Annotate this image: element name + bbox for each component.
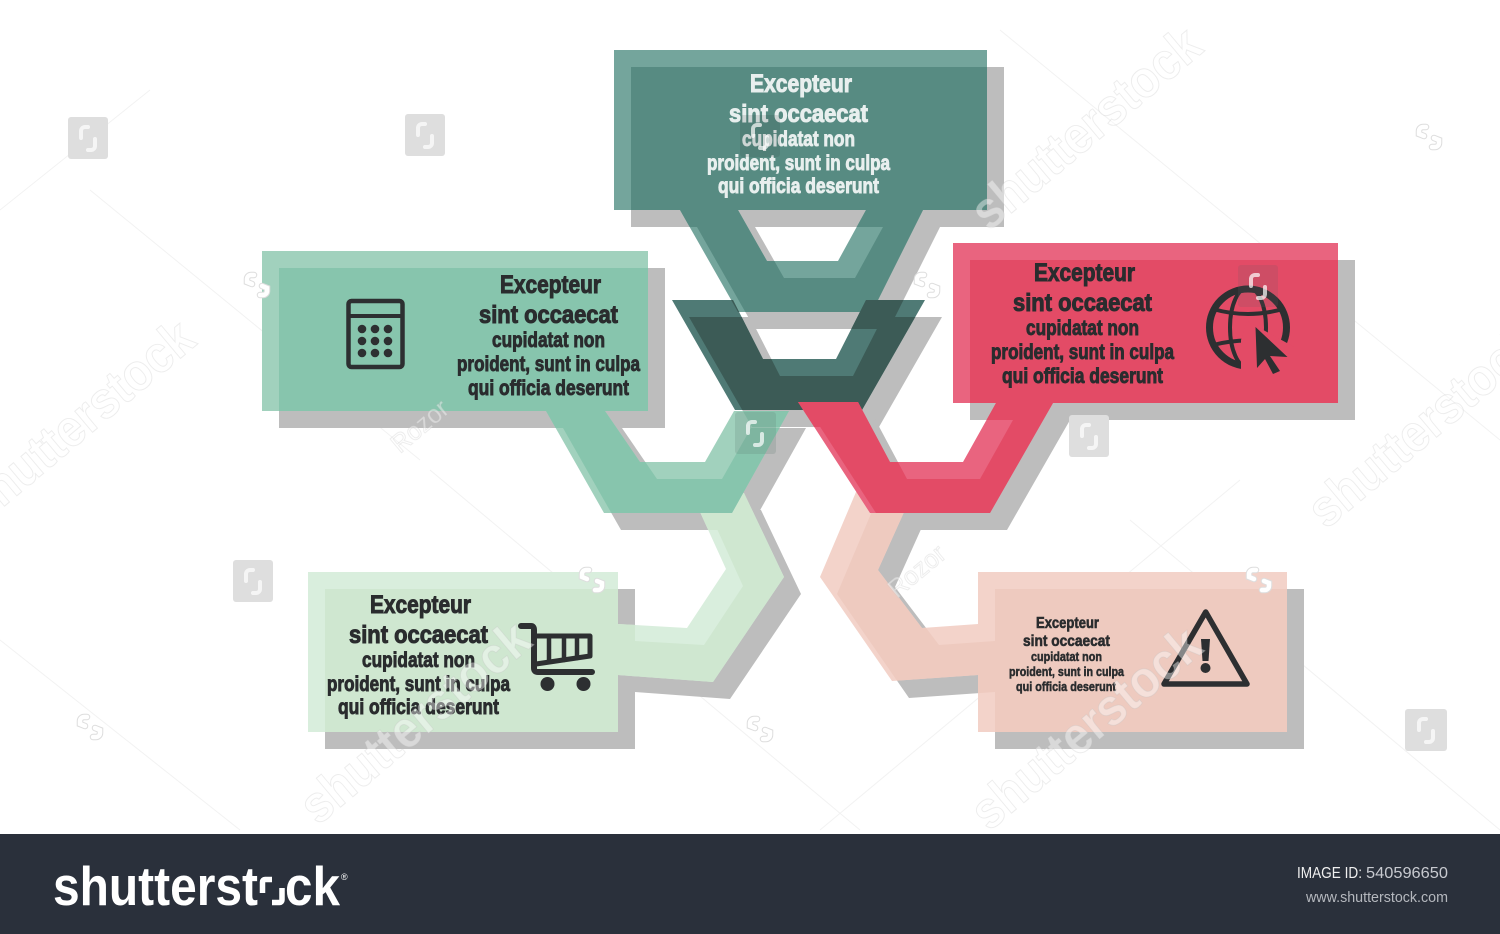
text: teal panel copy: cupidatat non bbox=[742, 128, 855, 151]
footer bar bbox=[0, 834, 1500, 934]
text: green panel copy: cupidatat non bbox=[492, 329, 605, 352]
panel: mint cart callout bbox=[308, 490, 784, 732]
text: red panel copy: qui officia deserunt bbox=[1002, 365, 1163, 388]
icon: calculator bbox=[348, 301, 402, 367]
text: mint panel copy: cupidatat non bbox=[362, 649, 475, 672]
footer image id: www.shutterstock.com bbox=[1305, 889, 1448, 906]
text: red panel copy: sint occaecat bbox=[1013, 289, 1153, 317]
text: teal panel copy bbox=[707, 70, 890, 198]
watermark: diagonal stock wordmarks: shutterstock bbox=[288, 609, 542, 835]
text: red panel copy bbox=[991, 259, 1174, 388]
text: teal panel copy: sint occaecat bbox=[729, 100, 869, 128]
text: red panel copy: proident, sunt in culpa bbox=[991, 341, 1174, 364]
text: peach panel copy bbox=[1009, 615, 1125, 694]
footer logo wordmark: ck bbox=[285, 855, 340, 917]
text: mint panel copy: proident, sunt in culpa bbox=[327, 673, 510, 696]
text: peach panel copy: Excepteur bbox=[1036, 615, 1099, 632]
footer image id bbox=[1297, 865, 1448, 906]
panel: green calculator callout bbox=[262, 251, 789, 513]
text: peach panel copy: cupidatat non bbox=[1031, 650, 1102, 664]
text: green panel copy: Excepteur bbox=[500, 271, 601, 299]
watermark: diagonal stock wordmarks: shutterstock bbox=[959, 15, 1213, 241]
footer image id: 540596650 bbox=[1366, 865, 1448, 882]
text: red panel copy: Excepteur bbox=[1034, 259, 1135, 287]
text: peach panel copy: sint occaecat bbox=[1023, 633, 1110, 650]
panel: red globe callout bbox=[798, 243, 1338, 513]
text: green panel copy: sint occaecat bbox=[479, 301, 619, 329]
panel: teal top callout bbox=[614, 50, 987, 312]
text: red panel copy: cupidatat non bbox=[1026, 317, 1139, 340]
text: mint panel copy: Excepteur bbox=[370, 591, 471, 619]
text: green panel copy: qui officia deserunt bbox=[468, 377, 629, 400]
watermark: diagonal stock wordmarks: Rozor bbox=[882, 538, 952, 604]
panel: peach warning callout bbox=[820, 490, 1287, 732]
text: green panel copy: proident, sunt in culpa bbox=[457, 353, 640, 376]
text: teal panel copy: qui officia deserunt bbox=[718, 175, 879, 198]
watermark: diagonal stock wordmarks: Rozor bbox=[385, 393, 455, 459]
watermark: stock logo squares bbox=[68, 114, 1447, 751]
text: mint panel copy bbox=[327, 591, 510, 719]
watermark: diagonal stock wordmarks: shutterstock bbox=[959, 615, 1213, 841]
text: peach panel copy: qui officia deserunt bbox=[1016, 680, 1117, 694]
text: mint panel copy: qui officia deserunt bbox=[338, 696, 499, 719]
footer logo wordmark: ® bbox=[341, 872, 348, 882]
text: teal panel copy: Excepteur bbox=[750, 70, 852, 98]
text: mint panel copy: sint occaecat bbox=[349, 621, 489, 649]
text: peach panel copy: proident, sunt in culpa bbox=[1009, 665, 1125, 679]
text: green panel copy bbox=[457, 271, 640, 400]
footer image id: IMAGE ID: bbox=[1297, 865, 1362, 882]
centre dark chevron bbox=[672, 300, 925, 410]
drop shadows bbox=[279, 67, 1355, 749]
footer logo wordmark: shutterst bbox=[53, 855, 258, 917]
icon: shopping cart bbox=[521, 626, 592, 691]
text: teal panel copy: proident, sunt in culpa bbox=[707, 152, 890, 175]
icon: warning triangle bbox=[1164, 612, 1247, 684]
icon: globe with cursor bbox=[1210, 288, 1296, 380]
